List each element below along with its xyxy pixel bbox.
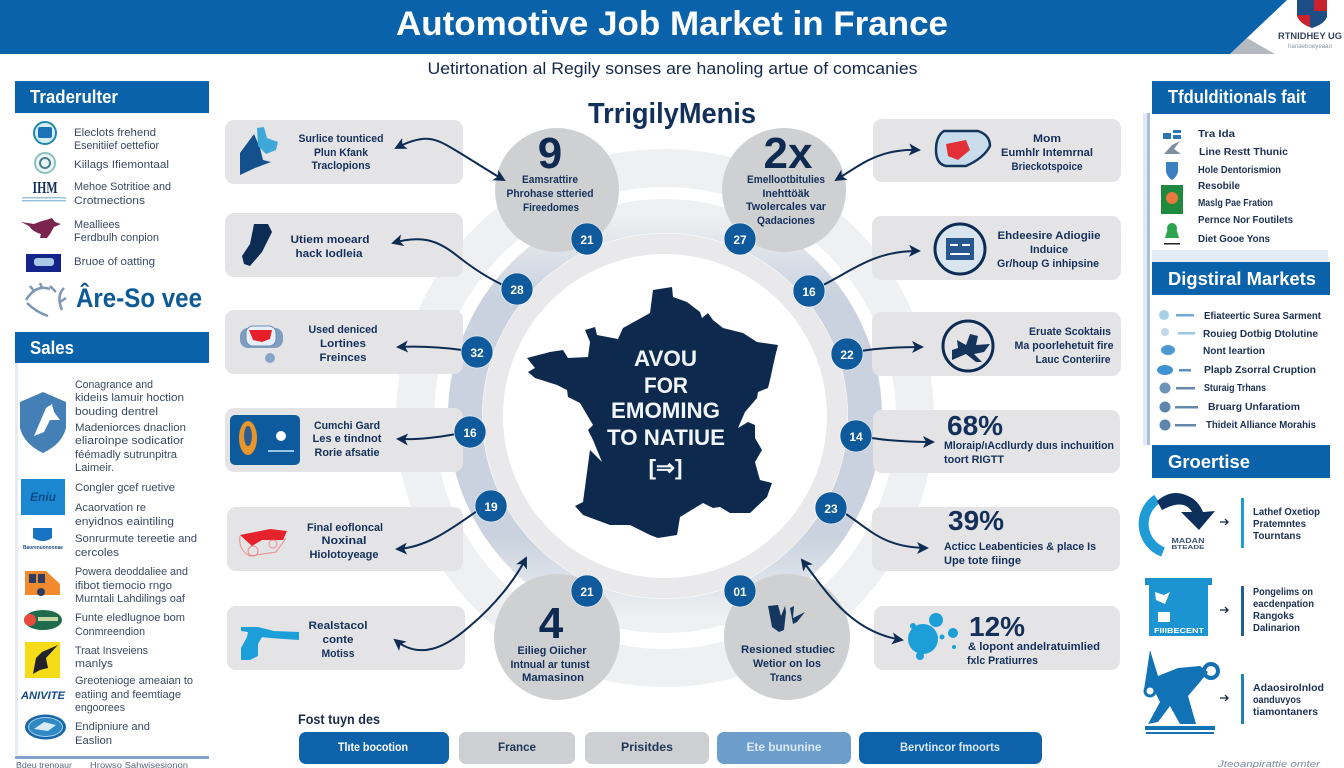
panel: digital markets (1152, 262, 1330, 431)
panel: left card 5 (227, 507, 463, 571)
panel: left card 5: Hiolotoyeage (310, 549, 378, 561)
text: sales list: Congler gcef ruetive (75, 482, 175, 494)
text: sales list: Greotenioge ameaian to (75, 675, 193, 687)
button: location: Tlıte bocotion (338, 740, 408, 754)
panel: right card 6: fxlc Pratiurres (967, 655, 1038, 667)
text: sales list: Madeniorces dnaclion (75, 422, 186, 434)
panel: digital markets: Thideit Alliance Morahis (1206, 420, 1316, 431)
text: sales list: Conagrance and (75, 379, 153, 391)
panel: sales heading: Sales (30, 338, 74, 358)
panel: right card 5: 39% (948, 505, 1004, 536)
icon: circled rider (943, 321, 993, 371)
numbered badges: 28 (510, 283, 524, 297)
title: Automotive Job Market in France (396, 5, 948, 43)
text: sales list: Murntali Lahdilings oaf (75, 593, 186, 605)
panel: digital markets: Rouieg Dotbig Dtolutine (1203, 329, 1318, 340)
icon: navy figure (768, 605, 805, 632)
icon: blue can: Baorenuonoonae (23, 545, 63, 551)
panel: right card 4 (873, 410, 1120, 473)
button: location (299, 732, 449, 764)
panel: right card 3: Lauc Conteriire (1036, 354, 1110, 366)
numbered badges: 19 (484, 500, 498, 514)
subtitle: Uetirtonation al Regily sonses are hanoling artue of comcanies (428, 59, 918, 78)
icon: grey mark (1164, 141, 1181, 154)
panel: groertise (1144, 445, 1330, 768)
panel: right card 6 (874, 606, 1120, 670)
button: prisitdes (585, 732, 709, 764)
numbered badges: 01 (733, 585, 747, 599)
button: france: France (498, 740, 536, 754)
panel: left card 4: Cumchi Gard (314, 420, 380, 432)
panel: traderulter list: Kiilags Ifiemontaal (74, 159, 169, 171)
panel: right card 5: Acticc Leabenticies & place Is (944, 541, 1096, 553)
panel: traderulter heading: Traderulter (30, 87, 118, 107)
panel: traderulter list: Mealliees (74, 219, 120, 231)
panel: left card 2: hack Iodleia (296, 248, 363, 260)
text: sales list: enyidnos eaintiling (75, 516, 174, 528)
icon: red car map (240, 326, 283, 363)
map caption: FOR (644, 373, 688, 398)
button: bununine (717, 732, 851, 764)
button: imports: Bervtincor fmoorts (900, 740, 1000, 754)
panel: sales list (15, 363, 209, 768)
arrows: small (1220, 519, 1228, 701)
icon: blue logo square (21, 479, 65, 515)
stat circle: top right: Inehttöäk (762, 188, 810, 200)
panel: groertise: Lathef Oxetiop (1253, 507, 1320, 518)
panel: additional facts: Maslg Pae Fration (1198, 198, 1273, 209)
icon: blue oval (25, 714, 66, 740)
panel: left card 2 (225, 213, 463, 277)
icon: curved arrow gauge: MADAN (1172, 538, 1204, 545)
panel: right card 1: Mom (1033, 133, 1061, 145)
stat circle: top right: Qadaciones (757, 215, 815, 227)
stat circle: top right: 2x (764, 129, 813, 178)
icon: blue logo square: Eniu (30, 490, 57, 504)
panel: groertise: Tourntans (1253, 531, 1301, 542)
map caption: TO NATIUE (607, 425, 725, 450)
stat circle: bottom right: Trancs (770, 672, 802, 684)
text: sales list: kideiıs lamuir hoction (75, 392, 184, 404)
panel: right card 4: 68% (947, 410, 1003, 441)
panel: additional facts: Resobile (1198, 181, 1240, 192)
icon: blue can (23, 528, 63, 551)
icon: curved arrow gauge (1144, 493, 1215, 552)
panel: left card 1: Traclopions (312, 160, 370, 172)
panel: traderulter list (21, 122, 202, 316)
map caption: [⇒] (648, 455, 682, 480)
icon: green oval (24, 610, 62, 630)
icons: bullet markers (1157, 310, 1198, 430)
panel: additional facts: Diet Gooe Yons (1198, 234, 1270, 245)
panel: right card 3 (872, 312, 1121, 376)
panel: right card 2: Induice (1030, 244, 1068, 256)
text: sales list: Laimeir. (75, 462, 114, 474)
groertise heading (1152, 445, 1330, 478)
panel: right card 4: toort RIGTT (944, 454, 1004, 466)
panel: additional facts: Tra Ida (1198, 129, 1235, 140)
panel: groertise: eacdenpation (1253, 599, 1314, 610)
stat circle: top left: Eamsrattire (522, 174, 578, 186)
groertise heading: Groertise (1168, 452, 1250, 472)
panel: groertise: Pratemntes (1253, 519, 1306, 530)
icon: blue bars (1163, 130, 1181, 139)
text: left footnote (16, 761, 188, 768)
numbered badges: 21 (580, 233, 594, 247)
panel: right card 3: Ma poorlehetuit fire (1014, 340, 1114, 352)
panel: groertise: Adaosirolnlod (1253, 683, 1324, 694)
text: sales list: Conmreendion (75, 626, 145, 638)
stat circle: bottom left: 4 (539, 599, 564, 648)
panel: digital markets: Efiateertic Surea Sarment (1204, 311, 1322, 322)
text: sales list: Sonrurmute tereetie and (75, 533, 197, 545)
panel: left card 6 (227, 606, 465, 670)
text: item 1: Eleclots frehend (74, 127, 156, 139)
panel: groertise: oanduvyos (1253, 695, 1301, 706)
panel: additional facts (1143, 81, 1330, 445)
icon: yellow square (25, 642, 60, 678)
footer legend (298, 711, 1042, 764)
stat circle: bottom left: Eilieg Oiicher (518, 645, 587, 657)
button: prisitdes: Prisitdes (621, 740, 673, 754)
panel: digital markets: Bruarg Unfaratiom (1208, 402, 1300, 413)
icon: antlers (26, 283, 66, 316)
text: sales list: bouding dentrel (75, 406, 158, 418)
numbered badges: 22 (840, 348, 854, 362)
panel: right card 2: Gr/houp G inhipsine (997, 258, 1099, 270)
numbered badges (454, 223, 872, 607)
text: sales list: eliaroinpe sodicatior (75, 435, 184, 447)
panel: left card 5: Noxinal (322, 535, 366, 547)
icon: IHM logo: IHM (32, 178, 58, 197)
panel: left card 6: Realstacol (308, 620, 368, 632)
panel: left card 4 (225, 408, 463, 472)
panel: left card 6: Motiss (322, 648, 354, 660)
stat circle: top left (495, 128, 619, 252)
button: france (459, 732, 575, 764)
panel: right card 5 (872, 505, 1120, 571)
numbered badges: 27 (733, 233, 747, 247)
icon: red car (240, 529, 287, 556)
icon: blue spray tool (241, 627, 299, 660)
panel: left card 3: Freinces (320, 352, 366, 364)
logo: shield badge: RTNIDHEY UG (1278, 31, 1342, 42)
panel: right card 1 (873, 119, 1121, 182)
map caption: EMOMING (611, 398, 720, 423)
icon: small shield (1166, 162, 1178, 180)
text: sales list (75, 379, 197, 747)
map caption (607, 346, 725, 480)
icon: blue badge (26, 254, 61, 272)
panel: right card 4: Mloraip/ıAcdlurdy duıs inchuıition (944, 440, 1114, 452)
central concentric rings (415, 168, 915, 668)
icon: green book (1161, 185, 1183, 214)
panel: right card 2 (872, 216, 1121, 280)
arrows linking badges to cards (393, 139, 933, 650)
icon: blue machine figure (1144, 650, 1218, 734)
map of france (527, 287, 778, 538)
panel: right card 5: Upe tote fiinge (944, 555, 1021, 567)
stat circle: bottom right (724, 574, 850, 700)
icon: IHM logo (22, 178, 66, 202)
text: sales list: manlys (75, 658, 114, 670)
numbered badges: 23 (824, 502, 838, 516)
icon: blue badge with gear (230, 415, 300, 465)
legend title: Fost tuyn des (298, 711, 380, 727)
panel: left card 1 (225, 120, 463, 184)
panel: additional facts: Hole Dentorismion (1198, 165, 1281, 176)
header banner (0, 0, 1344, 54)
icon: shield (20, 392, 66, 453)
panel: left card 6: conte (322, 634, 354, 646)
heading: trrigilymenis: TrrigilyMenis (588, 98, 756, 130)
button: bununine: Ete bununine (746, 740, 822, 754)
logo: shield badge: hanaeboeyeaan (1288, 44, 1332, 50)
stat circle: bottom left: Mamasinon (522, 672, 584, 684)
icon: circled dashboard (935, 224, 985, 274)
icon: curved arrow gauge: BTEADE (1172, 545, 1206, 551)
numbered badges: 32 (470, 346, 484, 360)
side bars (1241, 498, 1244, 724)
panel: digital markets: Nont leartion (1203, 346, 1265, 357)
icon: maroon bird (21, 218, 61, 238)
panel: sales heading (15, 332, 209, 363)
text: sales list: Acaorvation re (75, 502, 146, 514)
stat circle: bottom left (494, 574, 620, 700)
icon: blue crest panel (1145, 578, 1212, 636)
stat circle: bottom left: Intnual ar tunıst (510, 659, 590, 671)
panel: left card 2: Utiem moeard (290, 234, 370, 246)
text: sales list: Traat Insveiens (75, 645, 148, 657)
digital markets heading (1152, 262, 1330, 295)
stat circle: top left: 9 (538, 129, 562, 178)
stat circle: top right (722, 128, 846, 252)
icon: orange van (25, 571, 60, 596)
numbered badges: 16 (802, 285, 816, 299)
panel: left card 1: Surlice tounticed (298, 133, 384, 145)
text: sales list: cercoles (75, 547, 120, 559)
icon: teal emblem (34, 122, 56, 144)
panel: additional facts: Line Restt Thunic (1199, 147, 1288, 158)
panel: left card 1: Plun Kfank (314, 147, 369, 159)
numbered badges: 14 (849, 430, 863, 444)
icon: blue splash (908, 613, 958, 660)
panel: right card 6: & lopont andelratuimlied (968, 641, 1100, 653)
numbered badges: 21 (580, 585, 594, 599)
panel: left card 3: Used deniced (308, 324, 378, 336)
stat circle: top right: Emellootbitulies (747, 174, 825, 186)
panel: traderulter list: Bruoe of oatting (74, 256, 155, 268)
text: sales list: eatiing and feemtiage (75, 689, 181, 701)
panel: groertise: Dalinarion (1253, 623, 1300, 634)
panel: right card 1: Brieckotspoice (1012, 161, 1082, 173)
text: sales list: Powera deoddaliee and (75, 566, 188, 578)
panel: digital markets: Sturaig Trhans (1204, 383, 1266, 394)
icon: hand with bottle (240, 127, 278, 175)
text: sales list: Easlion (75, 735, 112, 747)
stat circle: top left: Fireedomes (523, 202, 579, 214)
stat circle: top right: Twolercales var (746, 201, 827, 213)
digital markets heading: Digstiral Markets (1168, 269, 1316, 289)
icon: green figure (1164, 223, 1180, 244)
text: sales list: ifibot tiemocio rngo (75, 580, 172, 592)
icon: tall boot (242, 224, 272, 266)
icon: pale emblem (35, 153, 55, 173)
additional facts heading (1152, 81, 1330, 114)
panel: additional facts: Pernce Nor Foutilets (1198, 215, 1293, 226)
text: sales list: engoorees (75, 702, 125, 714)
panel: groertise: Pongelims on (1253, 587, 1313, 598)
text: sales list: féémadly sutrunpitra (75, 449, 178, 461)
additional facts heading: Tfdulditionals fait (1168, 87, 1306, 107)
panel: right card 1: Eumhlr Intemrnal (1001, 147, 1093, 159)
stat circle: top left: Phrohase stteried (506, 188, 594, 200)
panel: left card 3: Lortines (320, 338, 366, 350)
panel: traderulter list: Esenitiief oettefior (74, 140, 159, 152)
text: are-so vee: Âre-So vee (76, 282, 202, 313)
panel: traderulter heading (15, 81, 209, 113)
panel: left card 4: Rorie afsatie (314, 447, 380, 459)
button: imports (859, 732, 1042, 764)
icon: anivite wordmark: ANIVITE (20, 690, 66, 702)
panel: digital markets: Plapb Zsorral Cruption (1204, 365, 1316, 376)
panel: groertise: tiamontaners (1253, 707, 1318, 718)
icon: red map blob (936, 131, 990, 166)
logo: shield badge (1278, 0, 1342, 50)
stat circle: bottom right: Wetior on los (753, 658, 821, 670)
panel: traderulter list: Mehoe Sotritioe and (74, 181, 171, 193)
stat circle: bottom right: Resioned studiec (741, 644, 835, 656)
panel: traderulter list: Ferdbulh conpion (74, 232, 159, 244)
panel: left card 4: Les e tindnot (312, 433, 382, 445)
panel: right card 3: Eruate Scoktaiıs (1029, 326, 1111, 338)
icon: blue crest panel: FIIIBECENT (1154, 628, 1205, 635)
panel: groertise: Rangoks (1253, 611, 1294, 622)
panel: right card 2: Ehdeesire Adiogiie (998, 230, 1100, 242)
text: sales list: Funte eledlugnoe bom (75, 612, 185, 624)
panel: left card 5: Final eofloncal (307, 522, 383, 534)
panel: right card 6: 12% (969, 611, 1025, 642)
panel: left card 3 (225, 310, 463, 374)
map caption: AVOU (634, 346, 697, 371)
panel: traderulter list: Crotmections (74, 195, 146, 207)
numbered badges: 16 (463, 426, 477, 440)
text: sales list: Endipniure and (75, 721, 150, 733)
